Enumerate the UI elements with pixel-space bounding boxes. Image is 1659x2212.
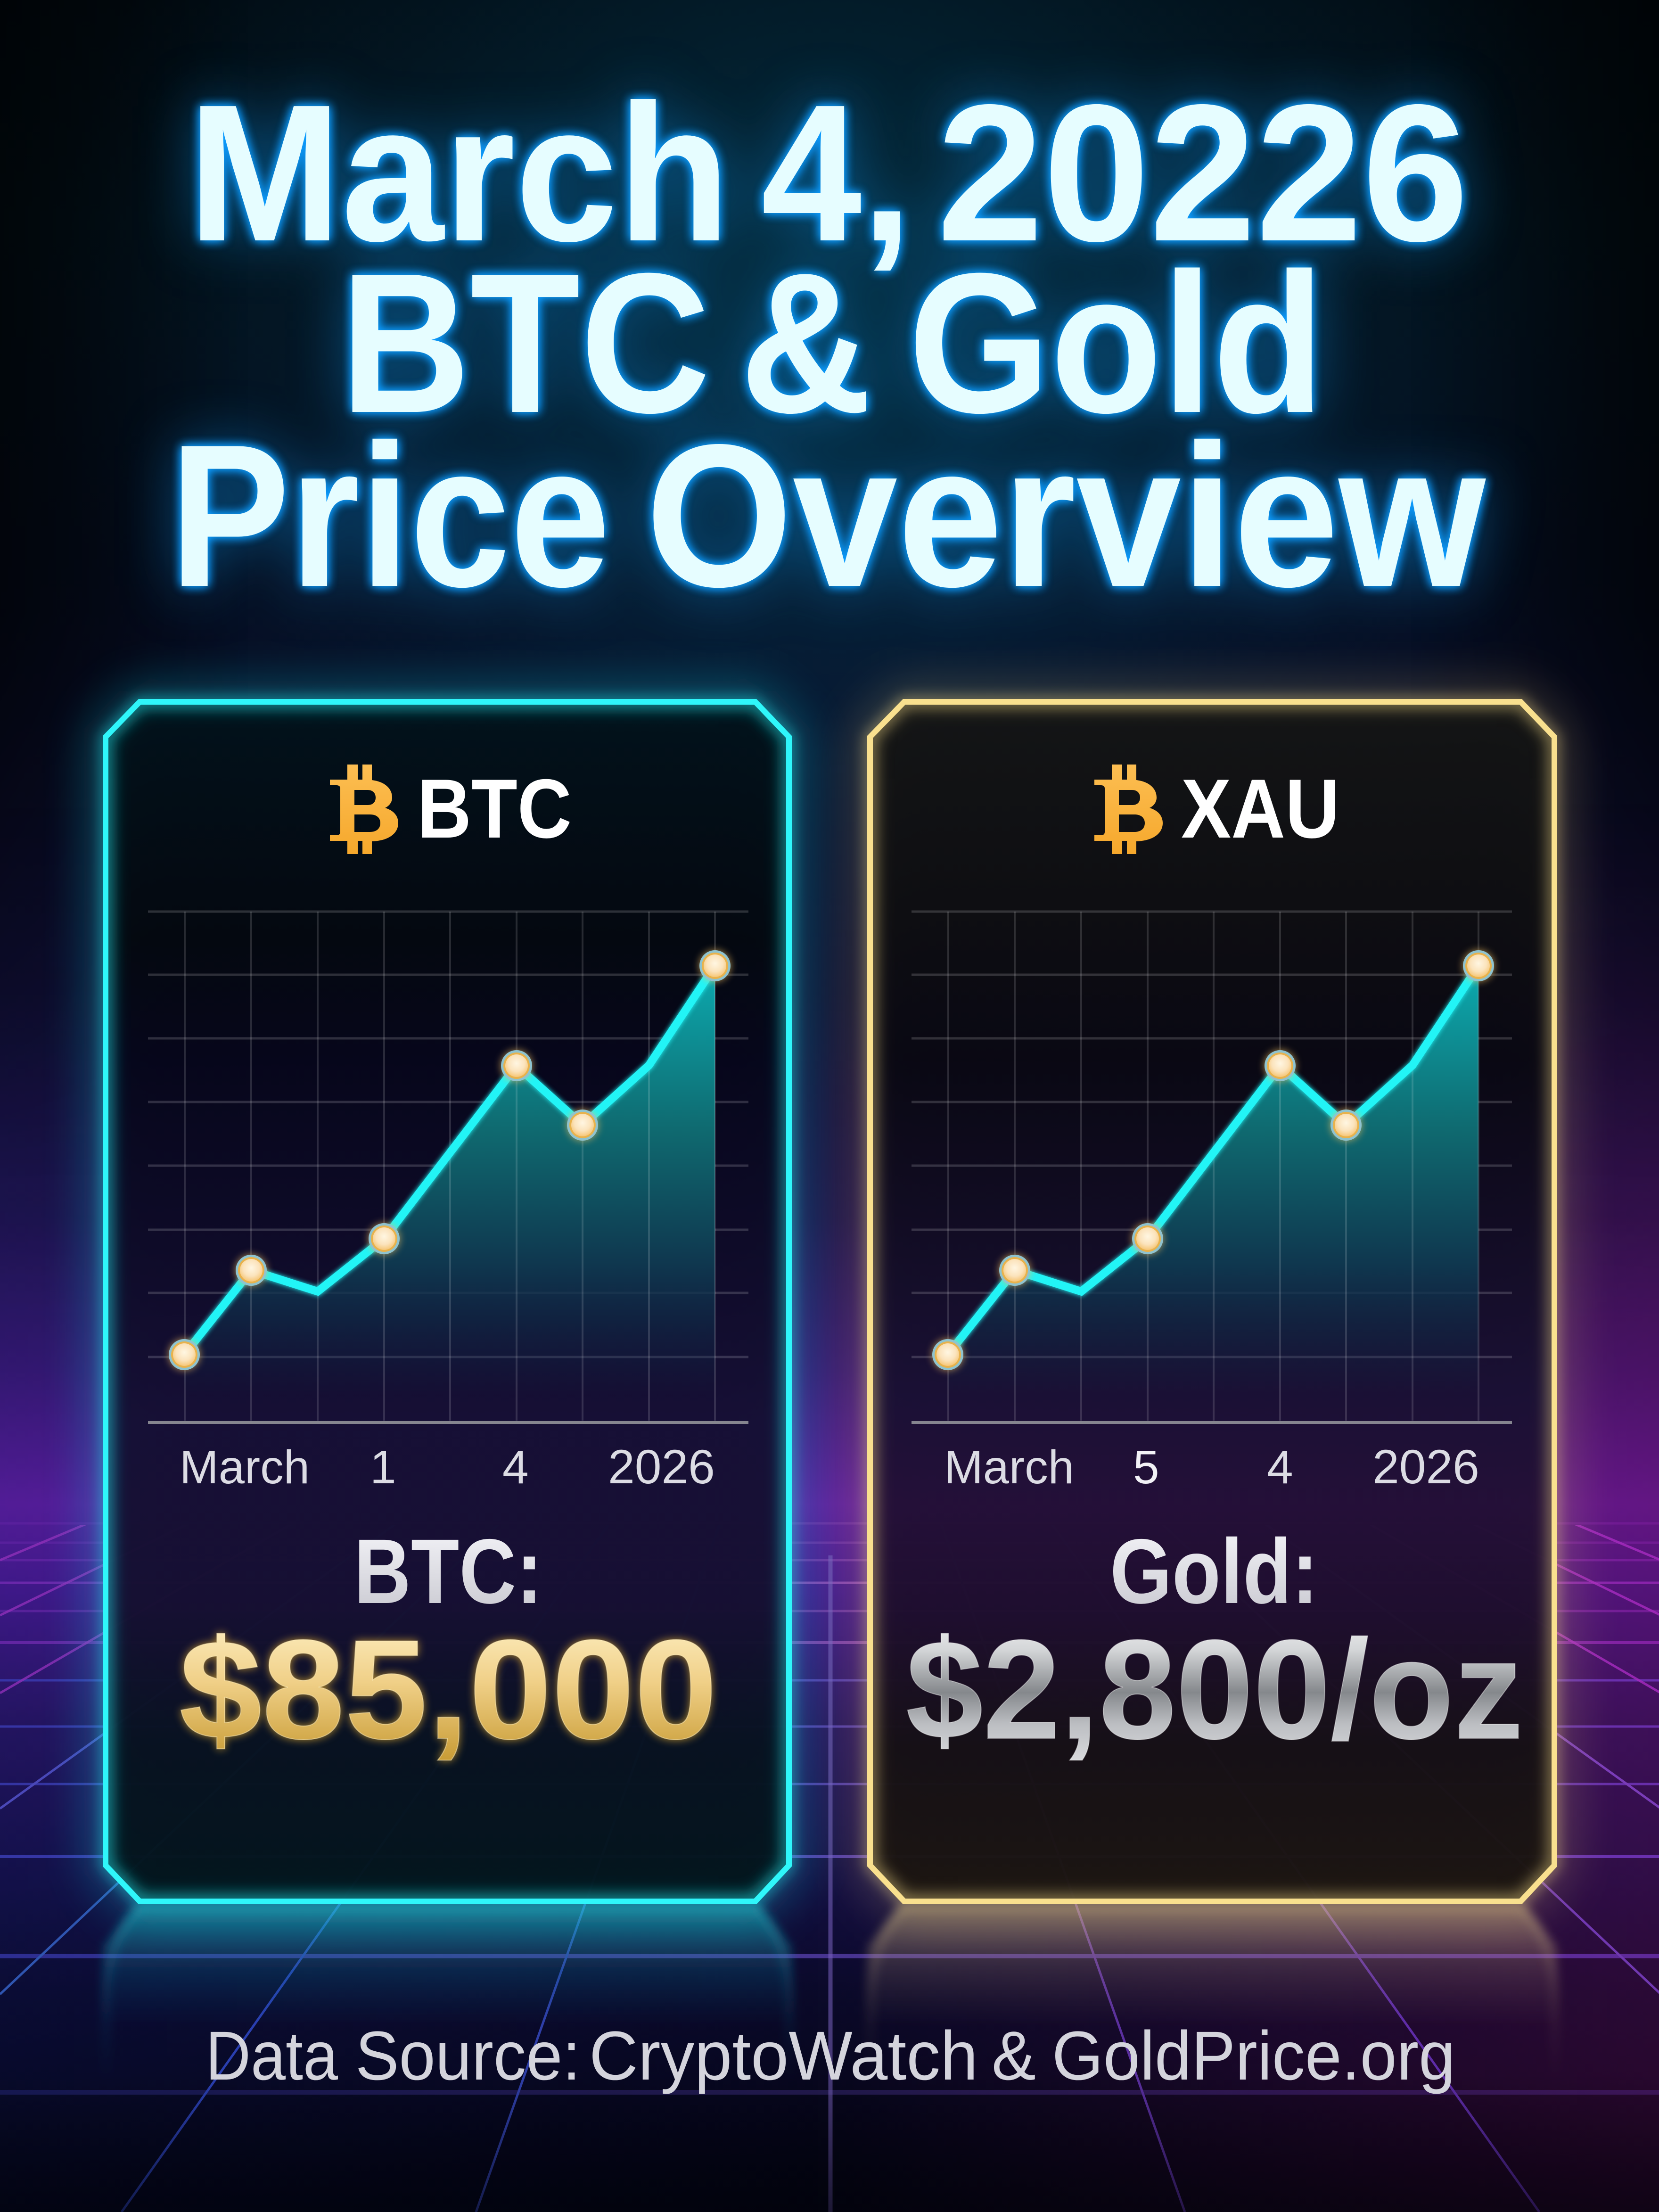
data source footer: &	[992, 2017, 1036, 2095]
axis labels	[180, 1440, 715, 1494]
card border	[870, 702, 1554, 1901]
card heading: XAU	[1181, 762, 1339, 855]
price label: Gold:	[1110, 1520, 1318, 1623]
price label: BTC:	[354, 1520, 542, 1623]
title: &	[740, 231, 872, 454]
card reflection	[867, 1904, 1557, 2083]
axis labels	[944, 1440, 1479, 1494]
data source footer: GoldPrice.org	[1052, 2017, 1455, 2095]
axis labels: March	[944, 1441, 1074, 1494]
line chart	[912, 912, 1512, 1423]
floor grid	[0, 1522, 1659, 2212]
axis labels: 1	[370, 1441, 396, 1494]
title: BTC	[340, 231, 710, 454]
data source footer: CryptoWatch	[589, 2017, 978, 2095]
title: 4,	[761, 64, 912, 282]
title	[170, 64, 1486, 629]
card reflection	[103, 1904, 792, 2083]
card heading: BTC	[417, 762, 572, 855]
line chart	[148, 912, 748, 1423]
icon: bitcoin	[330, 765, 398, 854]
axis labels: 4	[1267, 1441, 1293, 1494]
title: 20226	[937, 64, 1469, 282]
title: Overview	[646, 403, 1486, 629]
data source footer: Data	[205, 2017, 338, 2095]
data source footer	[205, 2017, 1455, 2095]
data source footer: Source:	[355, 2017, 581, 2095]
price value: $2,800/oz	[906, 1610, 1523, 1768]
title: March	[188, 64, 730, 282]
axis labels: March	[180, 1441, 310, 1494]
price value: $85,000	[179, 1610, 717, 1768]
axis labels: 2026	[608, 1440, 715, 1494]
title: Gold	[908, 231, 1324, 454]
panel: gold card	[867, 699, 1557, 2083]
axis labels: 2026	[1372, 1440, 1479, 1494]
title: Price	[170, 403, 610, 629]
card border	[106, 702, 789, 1901]
panel: BTC card	[103, 699, 792, 2083]
axis labels: 4	[502, 1441, 529, 1494]
axis labels: 5	[1133, 1441, 1159, 1494]
icon: bitcoin	[1094, 765, 1163, 854]
